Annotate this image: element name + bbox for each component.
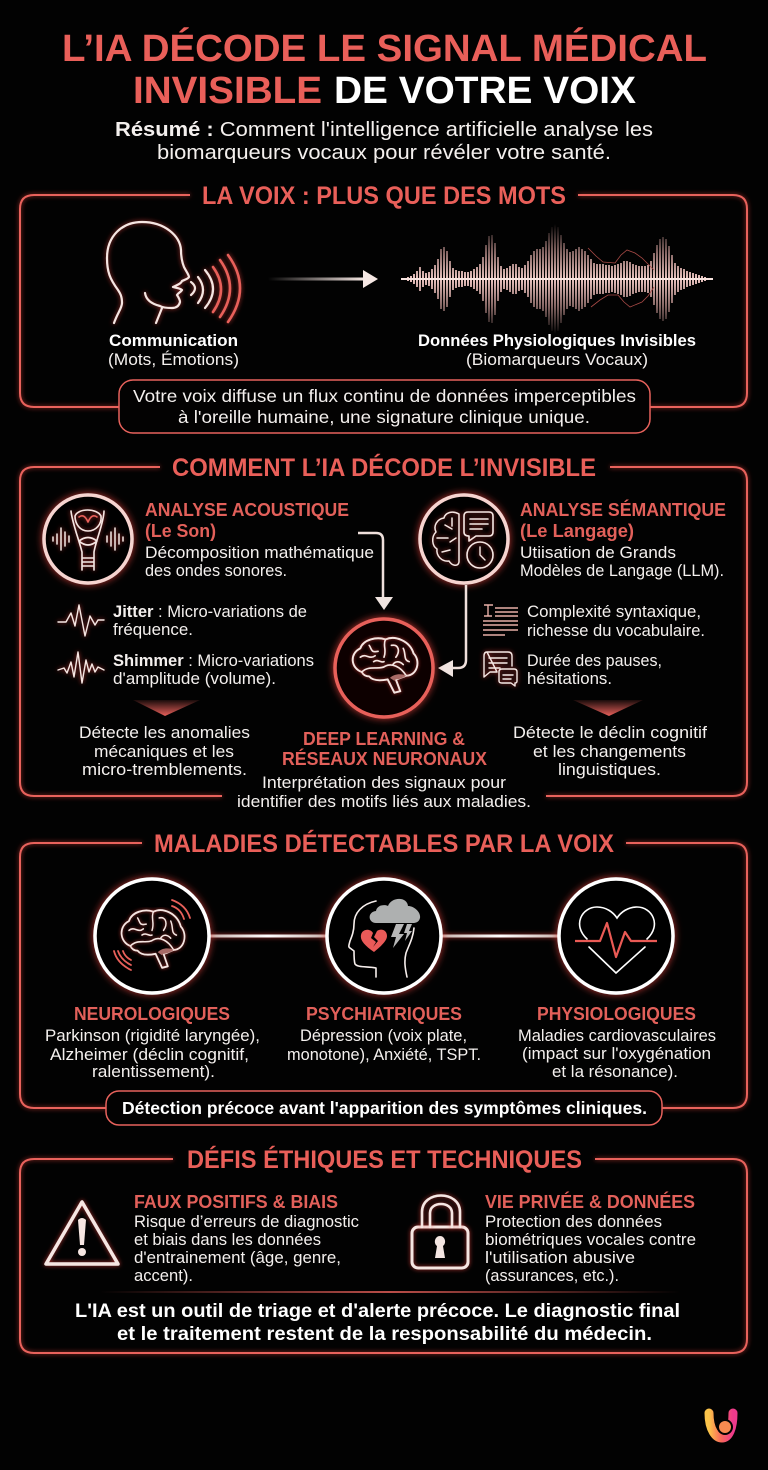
text: faux positifs [134, 1191, 359, 1285]
text: faux positifs: accent). [134, 1267, 193, 1285]
panel: comment l'IA decode: fréquence. [113, 621, 193, 639]
icon: larynx [44, 495, 132, 583]
icon: semantic brain chat clock [420, 495, 508, 583]
text: deep learning: DEEP LEARNING & [303, 728, 465, 749]
text: vie privee: l'utilisation abusive [485, 1249, 635, 1267]
callout: flux continu: Votre voix diffuse un flux continu de données imperceptibles [133, 386, 636, 406]
column: neurologiques: Parkinson (rigidité laryngée), [45, 1027, 260, 1045]
text: vie privee: biométriques vocales contre [485, 1231, 696, 1249]
text: analyse acoustique: des ondes sonores. [145, 562, 287, 580]
text: vie privee: VIE PRIVÉE & DONNÉES [485, 1191, 695, 1212]
label: donnees physiologiques [418, 332, 696, 369]
text: faux positifs: d'entrainement (âge, genre, [134, 1249, 341, 1267]
icon: chat bubbles [484, 652, 517, 686]
text: analyse acoustique: Décomposition mathématique [145, 544, 374, 562]
text: vie privee [485, 1191, 696, 1285]
heading: comment l'IA decode: COMMENT L’IA DÉCODE L’INVISIBLE [172, 453, 596, 482]
column: psychiatriques: monotone), Anxiété, TSPT. [287, 1046, 481, 1064]
text: shimmer: Shimmer : Micro-variations [113, 652, 314, 670]
heading: maladies: MALADIES DÉTECTABLES PAR LA VOIX [154, 829, 614, 858]
title: L’IA DÉCODE LE SIGNAL MÉDICAL [62, 26, 707, 70]
text: detecte anomalies [79, 724, 250, 779]
summary [115, 119, 653, 164]
text: analyse acoustique [145, 499, 374, 580]
panel: maladies [20, 829, 747, 1125]
icon: text lines [483, 605, 518, 635]
icon: psychiatric head [327, 879, 441, 993]
label: communication: (Mots, Émotions) [108, 350, 239, 369]
title [62, 26, 707, 112]
text: vie privee: (assurances, etc.). [485, 1267, 619, 1285]
text: complexite: Complexité syntaxique, [527, 603, 701, 621]
icon: central brain [335, 619, 433, 717]
callout: detection precoce [106, 1091, 662, 1125]
text: jitter: Jitter : Micro-variations de [113, 603, 307, 621]
column: physiologiques: Maladies cardiovasculaires [518, 1027, 716, 1045]
column: psychiatriques: Dépression (voix plate, [300, 1027, 467, 1045]
panel: comment l'IA decode: hésitations. [527, 670, 612, 688]
column: physiologiques [518, 1003, 716, 1081]
text: duree pauses: Durée des pauses, [527, 652, 662, 670]
summary: biomarqueurs vocaux pour révéler votre santé. [157, 142, 611, 164]
summary: Résumé : Comment l'intelligence artificielle analyse les [115, 119, 653, 141]
text: analyse semantique: ANALYSE SÉMANTIQUE [520, 499, 726, 520]
arrow: voice to data [268, 270, 378, 288]
chart: waveform [401, 224, 713, 334]
column: neurologiques [45, 1003, 260, 1081]
text: detecte declin [513, 724, 707, 779]
text: detecte declin: et les changements [533, 743, 686, 761]
text: analyse acoustique: ANALYSE ACOUSTIQUE [145, 499, 349, 520]
panel: comment l'IA decode: d'amplitude (volume). [113, 670, 276, 688]
text: deep learning: identifier des motifs liés aux maladies. [237, 793, 531, 811]
text: detecte declin: linguistiques. [558, 761, 661, 779]
icon: logo [709, 1413, 733, 1438]
column: neurologiques: ralentissement). [92, 1063, 215, 1081]
text: faux positifs: FAUX POSITIFS & BIAIS [134, 1191, 338, 1212]
callout: detection precoce: Détection précoce avant l'apparition des symptômes cliniques. [122, 1098, 647, 1118]
icon: speaking head [107, 222, 240, 323]
text: deep learning: Interprétation des signaux pour [262, 774, 507, 792]
label: donnees physiologiques: Données Physiologiques Invisibles [418, 332, 696, 350]
text: detecte anomalies: mécaniques et les [94, 743, 234, 761]
text: analyse semantique [520, 499, 726, 580]
icon: down triangle left [133, 700, 200, 716]
callout: flux continu [119, 380, 650, 433]
icon: shimmer wave [58, 652, 104, 683]
text: analyse semantique: Utiisation de Grands [520, 544, 676, 562]
text: faux positifs: Risque d’erreurs de diagnostic [134, 1213, 359, 1231]
text: analyse semantique: Modèles de Langage (LLM). [520, 562, 724, 580]
arrow: semantique to brain [438, 585, 466, 677]
column: psychiatriques [287, 1003, 481, 1064]
text: conclusion [75, 1300, 680, 1345]
text: vie privee: Protection des données [485, 1213, 662, 1231]
heading: defis: DÉFIS ÉTHIQUES ET TECHNIQUES [187, 1145, 582, 1174]
icon: warning [46, 1202, 118, 1264]
text: deep learning: RÉSEAUX NEURONAUX [282, 748, 488, 769]
text: conclusion: L'IA est un outil de triage et d'alerte précoce. Le diagnostic final [75, 1300, 680, 1322]
arrow: acoustique to brain [358, 533, 393, 610]
icon: lock [412, 1196, 468, 1268]
panel: comment l'IA decode [20, 453, 747, 811]
column: physiologiques: et la résonance). [552, 1063, 678, 1081]
text: analyse semantique: (Le Langage) [520, 520, 634, 541]
text: detecte declin: Détecte le déclin cognitif [513, 724, 707, 742]
text: analyse acoustique: (Le Son) [145, 520, 216, 541]
column: neurologiques: Alzheimer (déclin cognitif, [50, 1046, 249, 1064]
callout: flux continu: à l'oreille humaine, une signature clinique unique. [178, 407, 590, 427]
text: faux positifs: et biais dans les données [134, 1231, 321, 1249]
heading: la voix: LA VOIX : PLUS QUE DES MOTS [202, 182, 566, 210]
icon: neurological brain [95, 879, 209, 993]
icon: jitter wave [58, 605, 104, 636]
label: communication [108, 332, 239, 369]
panel: la voix [20, 182, 747, 433]
text: conclusion: et le traitement restent de la responsabilité du médecin. [117, 1323, 652, 1345]
text: detecte anomalies: Détecte les anomalies [79, 724, 250, 742]
title: DE VOTRE VOIX [334, 70, 637, 112]
column: psychiatriques: PSYCHIATRIQUES [306, 1003, 462, 1024]
column: physiologiques: PHYSIOLOGIQUES [537, 1003, 696, 1024]
icon: down triangle right [573, 700, 643, 716]
title: INVISIBLE [133, 70, 322, 112]
panel: defis [20, 1145, 747, 1353]
label: donnees physiologiques: (Biomarqueurs Vocaux) [466, 351, 648, 369]
label: communication: Communication [109, 332, 238, 350]
connectors [210, 934, 559, 938]
text: deep learning [237, 728, 531, 811]
column: neurologiques: NEUROLOGIQUES [74, 1003, 230, 1024]
text: detecte anomalies: micro-tremblements. [82, 761, 247, 779]
panel: comment l'IA decode: richesse du vocabulaire. [527, 622, 705, 640]
icon: physiological heart [559, 879, 673, 993]
column: physiologiques: (impact sur l'oxygénation [522, 1045, 711, 1063]
